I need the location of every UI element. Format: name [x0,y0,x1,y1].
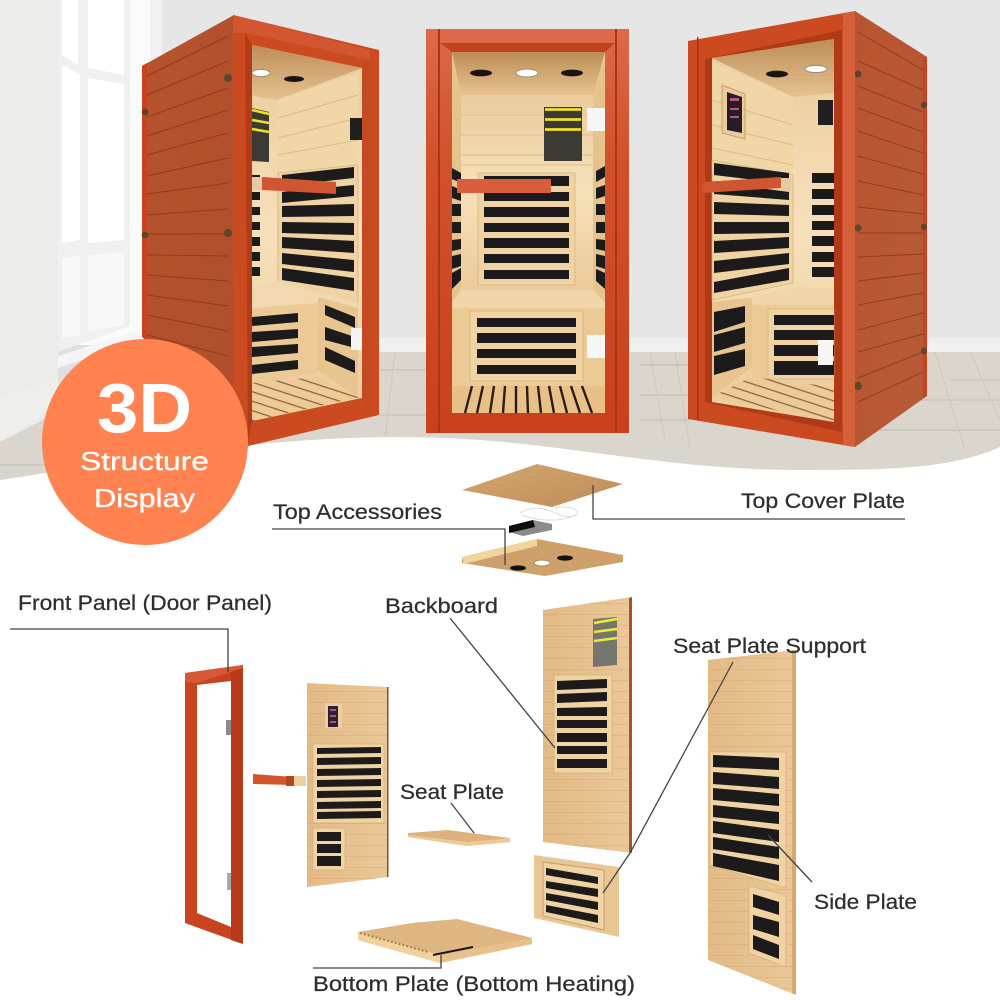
warning label [252,108,269,162]
part: bottom plate [358,919,532,963]
callout: Side Plate [768,835,917,914]
badge: 3D Structure Display: 3D [97,369,192,447]
side wall [854,11,927,447]
back heating panel [478,173,575,285]
part: top accessories power box and wire [509,507,578,536]
back panel with heating bars [278,165,358,303]
speaker box [818,100,833,125]
callout: Top Accessories [272,501,505,565]
sauna cabin: center front view [426,29,629,433]
part: seat plate support [534,855,619,937]
callout: Backboard [385,595,555,748]
sauna cabin: right view [688,11,927,447]
side bars [452,168,461,289]
back heating panel [712,160,793,300]
side wall [142,15,250,446]
interior [452,52,605,413]
lower heating panel [470,311,583,381]
sauna cabin: left view [142,15,379,446]
part: front door frame [185,665,243,944]
lower heating panel [768,309,834,379]
control panel [325,703,342,728]
control panel [722,85,745,139]
background: room with wall, window and floor [0,0,1000,480]
heating bars upper [710,752,786,888]
lower hinge [818,340,833,365]
floor slats [452,386,605,413]
white curved lower background [0,437,1000,1000]
part: ceiling plate with lights [462,539,623,576]
callout: Side Plate: Side Plate [814,891,917,914]
heating bars lower [749,886,786,967]
towel bar [703,177,781,193]
callout: Top Cover Plate [593,485,905,519]
warning label [593,617,617,667]
side heating bars [812,173,834,277]
callout: Front Panel (Door Panel): Front Panel (Door Panel) [18,592,272,615]
callout: Front Panel (Door Panel) [10,592,272,672]
callout: Seat Plate: Seat Plate [400,781,504,804]
window [58,0,162,368]
part: side plate [708,650,796,995]
warning label [544,107,582,161]
part: seat plate [408,830,510,846]
part: door side panel [307,683,388,887]
part: top cover plate [462,464,623,507]
interior [703,39,834,422]
part: backboard [543,597,632,853]
callout: Top Accessories: Top Accessories [273,501,442,524]
callout: Bottom Plate (Bottom Heating): Bottom Plate (Bottom Heating) [313,973,635,996]
interior [252,45,362,421]
part: towel bar [253,774,306,786]
floor slats [252,377,360,421]
callout: Seat Plate Support [603,635,866,893]
badge: 3D Structure Display: Display [94,483,195,513]
front frame [688,11,855,447]
floor slats [712,377,834,422]
seat [252,281,358,308]
glass hinges [350,118,365,140]
front frame [233,15,379,446]
seat [452,290,605,308]
badge: 3D Structure Display [42,339,248,545]
floor [0,352,1000,480]
heating bars upper [313,744,384,823]
callout: Bottom Plate (Bottom Heating) [313,955,635,996]
heating bars [554,675,612,773]
towel bar [252,177,262,190]
badge: 3D Structure Display: Structure [80,446,209,476]
towel bar [457,179,551,193]
seat [752,287,834,308]
baseboard [162,338,1000,352]
heating bars lower [313,828,345,870]
glass hinges [587,108,605,131]
callout: Top Cover Plate: Top Cover Plate [741,490,905,513]
callout: Seat Plate Support: Seat Plate Support [673,635,866,658]
callout: Backboard: Backboard [385,595,498,618]
callout: Seat Plate [400,781,504,833]
